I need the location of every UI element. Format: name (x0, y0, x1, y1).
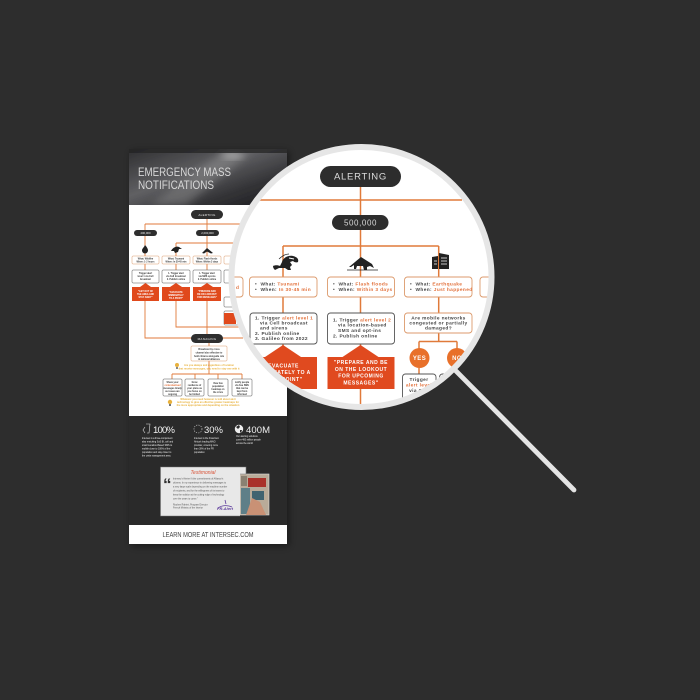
what/when text: flash floods: • When: Within 3 days (333, 287, 393, 293)
stat: 100%: small Location-Based SMS to (142, 444, 173, 447)
red box text (137, 290, 217, 300)
action box: tsunami (250, 313, 317, 344)
what/when boxes row (132, 256, 242, 264)
action box: flash floods: 2. Publish online (333, 333, 378, 339)
what/when box text: What: Wildfire (138, 258, 154, 260)
poster white body (129, 149, 287, 544)
red alert: prepare: MESSAGES" (343, 380, 379, 386)
managing text box: in national alliances (198, 358, 221, 361)
action box text: via SMS opt-ins (198, 275, 216, 278)
action box: tsunami: 1. Trigger alert level 1 (255, 316, 313, 322)
title: EMERGENCY MASS (138, 167, 231, 179)
stat: 100%: population and stay closer to (142, 451, 172, 454)
stat: 30%: than 30% of the FR (194, 448, 214, 450)
red box text: "PREPARE AND (198, 290, 216, 293)
tip: bulb and note (175, 363, 240, 370)
managing box text: that can be (236, 387, 249, 390)
action box text (138, 272, 217, 281)
managing text box: channel also effective to (196, 352, 223, 354)
red alert: prepare: "PREPARE AND BE (334, 360, 388, 366)
red alert: evacuate: EVACUATE (268, 364, 299, 370)
action box: tsunami: and sirens (260, 326, 288, 332)
stat: 100%: 100% (153, 425, 176, 436)
action box: flash floods: SMS and opt-ins (338, 328, 381, 334)
title: NOTIFICATIONS (138, 180, 214, 192)
stat: 100%: the crisis management area. (142, 454, 171, 458)
what/when text: wildfire fragment: d (236, 285, 239, 291)
red box text: FOR MESSAGES" (197, 296, 217, 299)
pill: alerting heading: ALERTING (334, 172, 387, 182)
managing box text: Grow (192, 382, 198, 384)
no circle (447, 348, 464, 366)
icon: fire (142, 245, 148, 254)
stat: 400M: across the world (236, 442, 253, 445)
testimonial card: keep the solution at the cutting edge of technology (173, 494, 225, 496)
no branch box (439, 374, 444, 378)
pill: managing: MANAGING (198, 337, 217, 341)
title (138, 167, 231, 192)
testimonial card: Intersec's Alerter fit the commitments of Alliance's (173, 478, 224, 480)
pill: alerting: ALERTING (198, 213, 216, 217)
pill: 500,000: 500,000 (344, 219, 377, 228)
managing text box: hold citizens alongside role (194, 355, 225, 358)
managing box text: heatmap on (212, 388, 225, 391)
pill: 500,000 (332, 215, 388, 230)
red alert: evacuate: SAFE POINT" (265, 377, 303, 383)
managing box text: your plans as (187, 388, 203, 390)
action box text: Trigger alert (139, 272, 152, 275)
managing box text: via free SMS (235, 385, 249, 387)
yes branch box: via Cell (409, 388, 429, 394)
lens connector lines (259, 187, 462, 412)
action box: tsunami: via Cell broadcast (260, 320, 308, 326)
managing text box (191, 346, 227, 361)
stat: 30%: Intersec is the Francisco (194, 437, 220, 440)
testimonial card (160, 467, 246, 516)
action box text: 2. Publish online (167, 279, 186, 281)
magnifier handle (455, 370, 574, 490)
managing box text: messages timely (163, 387, 182, 390)
stat: 400M: cover 400 million people (236, 438, 261, 442)
red box text: STAY AWAY" (139, 296, 152, 299)
red box text: "GET OUT OF (138, 291, 154, 293)
pill: managing (191, 334, 223, 343)
what/when text: tsunami: • What: Tsunami (255, 282, 299, 288)
managing box text: informed (237, 394, 248, 396)
icon: tsunami wave (273, 254, 298, 270)
pill: 2,000,000: 2,000,000 (201, 231, 214, 235)
stat: 30%: Africa's leading MNO (194, 440, 216, 444)
action box text: broadcast (140, 278, 151, 281)
managing box text: View live (213, 383, 224, 385)
testimonial card: citizens. In my experience in delivering messages to (173, 482, 227, 484)
managing box text: be limited (189, 393, 200, 396)
no circle: NO (452, 356, 462, 362)
stat: 30%: 30% (204, 425, 224, 436)
yes branch box: Trigger (410, 377, 428, 383)
stat: 100% (142, 424, 176, 458)
stat: 100%: mobile close to 100% of the (142, 448, 171, 450)
stat: 400M: Our alerting solutions (236, 435, 259, 438)
what/when box text: When: Within 3 days (196, 260, 219, 264)
question box: earthquake: congested or partially (409, 320, 468, 326)
what/when box text: When: In 30-45 min (166, 260, 187, 264)
red box text: "EVACUATE (169, 291, 183, 294)
testimonial card: “ (163, 475, 172, 494)
stat: 30% (194, 425, 224, 454)
dark stats panel (129, 416, 287, 525)
red alert: evacuate (263, 345, 317, 389)
testimonial card: over the years to come." (173, 498, 198, 500)
tip: second bulb and note: Whatever you need however is told about alert (180, 398, 236, 401)
stat: 30%: provider, covering more (194, 444, 219, 447)
action box: tsunami: 3. Galileo from 2022 (255, 336, 308, 342)
question box: earthquake: damaged? (425, 326, 452, 332)
what/when box text: What: Tsunami (168, 258, 185, 260)
managing box text: population (212, 385, 224, 388)
testimonial card: FR-Alert (217, 506, 234, 511)
action box: flash floods: via location-based (338, 323, 387, 329)
lens contents (234, 166, 488, 404)
what/when text: tsunami (255, 282, 310, 291)
managing box text: ongoing (168, 394, 178, 396)
pill: 2,000,000 (196, 230, 219, 236)
yes circle (410, 348, 430, 368)
what/when text: tsunami: • When: In 30-45 min (255, 287, 311, 293)
red box text: TO A POINT" (169, 297, 183, 300)
icon: collapsed house in flood (347, 257, 378, 270)
small side boxes (224, 297, 242, 325)
action box text: 2. Publish online (198, 279, 217, 281)
testimonial card: French Ministry of the Interior (173, 506, 203, 510)
pill: 200,000 (134, 230, 157, 236)
learn more footer: LEARN MORE AT INTERSEC.COM (162, 530, 254, 539)
action box text: level 1 via Cell (138, 276, 154, 278)
icon: wave (171, 247, 182, 253)
red alert: prepare (328, 345, 394, 389)
testimonial card: Rouben Rahimi, Program Director (173, 504, 208, 506)
red alert: prepare: FOR UPCOMING (338, 374, 384, 380)
what/when text: earthquake: • What: Earthquake (410, 282, 462, 288)
managing box text: you focus on (187, 391, 202, 393)
tip: second bulb and note: the more appropriate and depending on the situation (177, 404, 240, 407)
managing box text: notify people (235, 381, 250, 384)
pill: alerting heading (320, 166, 401, 187)
pill: alerting (191, 210, 223, 219)
icon: flood house (202, 248, 213, 254)
stat: 100%: also enriching SoS BI, cell and (142, 440, 174, 444)
action box text: 1. Trigger alert (199, 272, 215, 275)
header photo (129, 149, 287, 205)
managing box text (163, 381, 250, 396)
yes branch box (402, 374, 436, 398)
testimonial photo (240, 474, 269, 515)
icon: damaged buildings (432, 253, 449, 269)
managing boxes row (163, 379, 252, 396)
action box text: 1. Trigger alert (168, 272, 184, 275)
tip: bulb and note: that receive messages, you need to stay one with it (179, 368, 240, 370)
red alert: prepare: ON THE LOOKOUT (335, 367, 387, 373)
question box: earthquake (404, 313, 472, 333)
stat: 100%: Intersec is a three-component (142, 437, 173, 440)
managing box text: resilience of (188, 385, 201, 387)
stat: 400M (235, 425, 270, 445)
yes circle: YES (413, 356, 426, 362)
testimonial card: of recipients, and for the willingness of its teams to (173, 490, 225, 492)
what/when boxes in lens (234, 276, 488, 298)
managing box text: as issues are (165, 391, 180, 393)
red box text: THE AREA AND (137, 293, 154, 296)
action box: tsunami: 2. Publish online (255, 331, 300, 337)
lens ring (232, 147, 492, 407)
what/when text: earthquake: • When: Just happened (410, 287, 473, 293)
stat: 30%: population (194, 451, 205, 454)
tip: second bulb and note (168, 398, 240, 407)
tip: second bulb and note: technology to give an effective greater heatmaps for (177, 401, 239, 404)
action box: flash floods (328, 313, 394, 344)
managing box text: contextualised (164, 384, 181, 387)
testimonial card: a very large scale depending on the machine number (173, 486, 227, 488)
managing box text: the crisis (213, 391, 224, 394)
red box text: IMMEDIATELY (168, 294, 184, 297)
managing text box: Broadcast by cross (198, 348, 220, 351)
what/when box text (136, 258, 219, 264)
lens white fill (232, 147, 492, 407)
pill: 200,000: 200,000 (140, 231, 151, 235)
magnifier lens (228, 144, 494, 410)
red call-to-action boxes (132, 283, 221, 301)
action boxes row (132, 270, 242, 283)
what/when box text: What: Flash floods (197, 258, 218, 260)
testimonial card: Testimonial (190, 470, 216, 476)
what/when box text: When: 1-2 hours (136, 262, 155, 264)
red box text: BE ON LOOKOUT (197, 294, 217, 296)
tip: bulb and note: Are you always and regardless of location (184, 364, 234, 367)
question box: earthquake: Are mobile networks (411, 316, 466, 322)
red alert: evacuate: IMMEDIATELY TO A (256, 370, 311, 376)
infographic poster (129, 149, 287, 544)
what/when text: flash floods: • What: Flash floods (333, 282, 388, 288)
flow connector lines (145, 219, 287, 379)
what/when text: earthquake (410, 282, 472, 292)
managing box text: Share your (166, 382, 179, 384)
action box: flash floods: 1. Trigger alert level 2 (333, 318, 391, 324)
what/when text: flash floods (333, 282, 392, 292)
yes branch box: alert level (406, 382, 432, 388)
action box text: via Cell broadcast (166, 275, 186, 278)
stat: 400M: 400M (246, 425, 270, 436)
managing box text: kept from (237, 390, 247, 393)
